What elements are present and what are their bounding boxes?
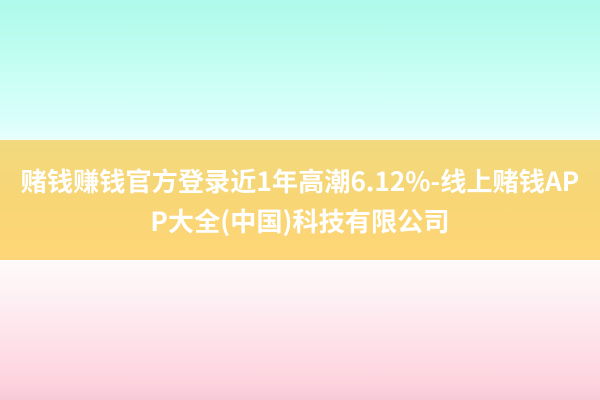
- panel: top gradient: [0, 0, 600, 140]
- panel: bottom gradient: [0, 260, 600, 400]
- panel: title band: [0, 140, 600, 260]
- title: 赌钱赚钱官方登录近1年高潮6.12%-线上赌钱AP: [21, 161, 579, 199]
- title: [21, 161, 579, 239]
- title: P大全(中国)科技有限公司: [150, 201, 450, 239]
